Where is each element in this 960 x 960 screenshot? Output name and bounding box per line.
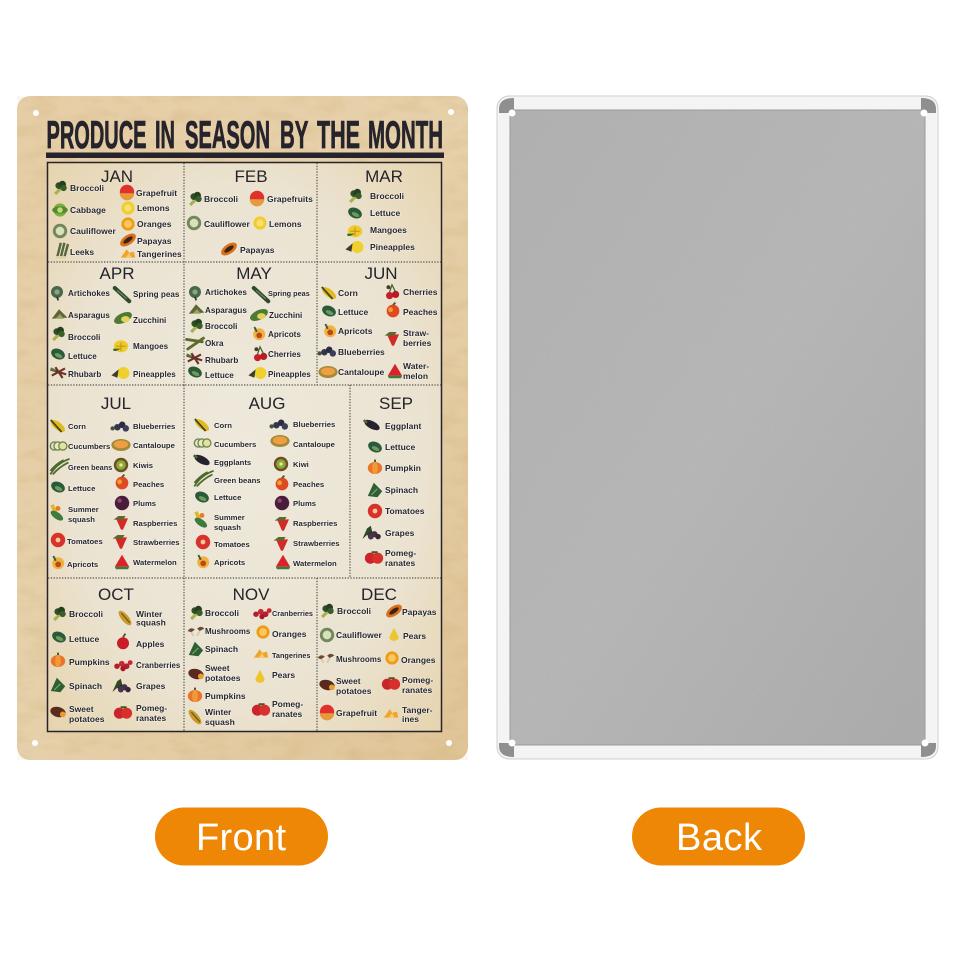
item: Pumpkins: Pumpkins — [69, 657, 110, 667]
title rule — [46, 152, 444, 158]
panel: September — [362, 394, 425, 568]
item: Summer squash: squash — [214, 523, 241, 532]
panel: August — [193, 394, 340, 569]
item: Summer squash — [193, 512, 245, 532]
panel: April — [49, 264, 180, 379]
item: Corn: Corn — [338, 288, 358, 298]
item: Cherries: Cherries — [403, 287, 438, 297]
item: Papayas: Papayas — [402, 607, 437, 617]
item: Pomegranates — [252, 699, 303, 719]
item: Broccoli: Broccoli — [205, 322, 237, 331]
item: Lettuce: Lettuce — [338, 307, 368, 317]
item: Sweet potatoes — [49, 704, 105, 724]
item: Eggplants — [193, 453, 251, 467]
item: Broccoli: Broccoli — [370, 191, 404, 201]
item: Winter squash: squash — [205, 717, 235, 727]
item: Pomegranates — [114, 703, 167, 723]
item: Plums: Plums — [133, 499, 156, 508]
item: Strawberries — [385, 328, 432, 348]
item: Cabbage: Cabbage — [70, 205, 106, 215]
item: Kiwis: Kiwis — [133, 461, 153, 470]
item: Peaches: Peaches — [293, 480, 324, 489]
item: Pumpkin: Pumpkin — [385, 463, 421, 473]
heading: APR: APR — [100, 264, 134, 283]
item: Kiwi: Kiwi — [293, 460, 309, 469]
item: Sweet potatoes: potatoes — [336, 686, 372, 696]
item: Winter squash — [186, 707, 235, 727]
item: Pomegranates: Pomeg- — [136, 703, 167, 713]
item: Tangerines — [254, 649, 310, 660]
item: Peaches: Peaches — [403, 307, 438, 317]
item: Watermelon: melon — [403, 371, 428, 381]
heading: JUL: JUL — [101, 394, 131, 413]
item: Broccoli: Broccoli — [204, 194, 238, 204]
item: Pineapples: Pineapples — [133, 370, 176, 379]
item: Tangerines: Tangerines — [272, 651, 310, 660]
item: Winter squash — [116, 609, 166, 628]
item: Cantaloupe: Cantaloupe — [338, 367, 385, 377]
item: Cucumbers: Cucumbers — [214, 440, 256, 449]
item: Pears: Pears — [403, 631, 426, 641]
item: Raspberries — [275, 517, 337, 531]
item: Tomatoes — [368, 504, 425, 518]
item: Watermelon — [115, 555, 177, 569]
item: Grapefruits: Grapefruits — [267, 194, 313, 204]
item: Cantaloupe: Cantaloupe — [133, 441, 176, 450]
item: Asparagus: Asparagus — [68, 311, 110, 320]
item: Tomatoes — [196, 535, 250, 549]
item: Lettuce: Lettuce — [385, 442, 416, 452]
item: Winter squash: squash — [136, 618, 166, 628]
item: Pumpkins — [188, 688, 246, 702]
item: Pears: Pears — [272, 670, 295, 680]
item: Strawberries: Straw- — [403, 328, 429, 338]
brushed grey metal back — [510, 110, 925, 745]
item: Tomatoes: Tomatoes — [67, 537, 103, 546]
item: Summer squash — [49, 505, 99, 524]
item: Tomatoes: Tomatoes — [214, 540, 250, 549]
item: Okra: Okra — [205, 339, 224, 348]
item: Tangerines: Tangerines — [137, 249, 182, 259]
item: Tangerines: Tanger- — [402, 705, 433, 715]
item: Broccoli: Broccoli — [68, 333, 100, 342]
item: Pomegranates: ranates — [136, 713, 167, 723]
item: Spinach: Spinach — [69, 681, 102, 691]
item: Strawberries — [113, 535, 180, 549]
item: Artichokes: Artichokes — [205, 288, 247, 297]
item: Apricots: Apricots — [268, 330, 301, 339]
item: Plums — [115, 496, 156, 510]
white aluminium frame — [497, 96, 938, 759]
item: Mushrooms: Mushrooms — [205, 627, 251, 636]
panel: front tin sign — [17, 96, 468, 760]
item: Sweet potatoes: Sweet — [336, 676, 361, 686]
heading: MAR: MAR — [365, 167, 403, 186]
icon: bottom-left mounting hole — [32, 740, 38, 746]
panel: October — [49, 585, 181, 724]
heading: SEP: SEP — [379, 394, 413, 413]
item: Broccoli: Broccoli — [70, 183, 104, 193]
item: Corn — [193, 417, 232, 433]
item: Sweet potatoes: potatoes — [69, 714, 105, 724]
item: Apricots: Apricots — [67, 560, 98, 569]
item: Blueberries: Blueberries — [133, 422, 175, 431]
item: Lemons: Lemons — [269, 219, 302, 229]
item: Raspberries — [114, 516, 177, 530]
title: BY — [280, 114, 308, 157]
item: Pumpkins: Pumpkins — [205, 691, 246, 701]
item: Eggplant — [363, 418, 422, 432]
item: Oranges: Oranges — [401, 655, 436, 665]
item: Pomegranates: ranates — [272, 709, 303, 719]
item: Spring peas: Spring peas — [268, 289, 310, 298]
item: Corn: Corn — [68, 422, 86, 431]
item: Kiwis — [114, 458, 153, 472]
item: Pomegranates: ranates — [385, 558, 416, 568]
item: Grapefruit: Grapefruit — [136, 188, 177, 198]
item: Plums: Plums — [293, 499, 316, 508]
panel: July — [49, 394, 180, 569]
item: Mangoes: Mangoes — [370, 225, 407, 235]
heading: OCT: OCT — [98, 585, 134, 604]
heading: JAN: JAN — [101, 167, 133, 186]
heading: AUG: AUG — [249, 394, 285, 413]
item: Mushrooms: Mushrooms — [336, 655, 382, 664]
item: Peaches — [276, 476, 324, 490]
item: Pomegranates — [382, 675, 433, 695]
item: Apples: Apples — [136, 639, 165, 649]
item: Cucumbers: Cucumbers — [68, 442, 110, 451]
heading: MAY: MAY — [236, 264, 272, 283]
icon: top-left corner bracket — [499, 98, 514, 113]
item: Green beans — [194, 471, 261, 486]
heading: JUN: JUN — [364, 264, 398, 283]
item: Lettuce — [193, 489, 242, 505]
item: Grapes — [362, 526, 415, 539]
icon: top-left hole — [508, 110, 516, 116]
item: Sweet potatoes: Sweet — [69, 704, 94, 714]
item: Cauliflower: Cauliflower — [70, 226, 117, 236]
item: Papayas: Papayas — [137, 236, 172, 246]
item: Tomatoes: Tomatoes — [385, 506, 425, 516]
item: Oranges: Oranges — [272, 629, 307, 639]
item: Strawberries: Strawberries — [133, 538, 180, 547]
item: Eggplant: Eggplant — [385, 421, 422, 431]
item: Winter squash: Winter — [136, 609, 162, 619]
item: Green beans: Green beans — [68, 463, 112, 472]
item: Pears — [255, 670, 295, 683]
item: Pomegranates — [365, 548, 416, 568]
item: Raspberries: Raspberries — [293, 519, 337, 528]
heading: FEB: FEB — [234, 167, 268, 186]
button: Front: Front — [196, 817, 286, 859]
item: Grapefruit: Grapefruit — [336, 708, 377, 718]
item: Watermelon — [388, 361, 429, 381]
item: Lettuce: Lettuce — [69, 634, 100, 644]
item: Blueberries — [110, 422, 175, 432]
item: Cauliflower: Cauliflower — [336, 630, 383, 640]
title: PRODUCE — [46, 114, 146, 157]
item: Lettuce — [366, 439, 416, 455]
item: Watermelon: Watermelon — [133, 558, 177, 567]
icon: bottom-right hole — [922, 740, 928, 746]
item: Spinach: Spinach — [385, 485, 418, 495]
item: Leeks: Leeks — [70, 247, 94, 257]
title: THE — [317, 114, 360, 157]
item: Cranberries — [253, 608, 313, 619]
item: Spinach: Spinach — [205, 644, 238, 654]
icon: bottom-left corner bracket — [499, 743, 514, 757]
heading: DEC: DEC — [361, 585, 397, 604]
item: Cranberries: Cranberries — [272, 609, 313, 618]
item: Cherries: Cherries — [268, 350, 301, 359]
item: Sweet potatoes: potatoes — [205, 673, 241, 683]
button: Front — [155, 808, 328, 866]
icon: bottom-right mounting hole — [446, 740, 452, 746]
item: Green beans: Green beans — [214, 476, 261, 485]
item: Apricots: Apricots — [338, 326, 373, 336]
panel: May — [186, 264, 311, 380]
item: Spring peas: Spring peas — [133, 290, 180, 299]
item: Eggplants: Eggplants — [214, 458, 251, 467]
item: Cucumbers — [194, 439, 256, 449]
item: Broccoli — [191, 606, 239, 619]
item: Lettuce: Lettuce — [68, 484, 96, 493]
item: Watermelon — [276, 555, 337, 569]
icon: top-right hole — [920, 110, 928, 116]
item: Cranberries: Cranberries — [136, 661, 181, 670]
item: Broccoli: Broccoli — [205, 608, 239, 618]
item: Plums — [275, 496, 316, 510]
item: Spinach — [189, 642, 238, 656]
item: Tangerines — [384, 705, 433, 724]
item: Tomatoes — [51, 533, 103, 547]
item: Spinach — [368, 483, 418, 497]
item: Lettuce: Lettuce — [205, 371, 234, 380]
item: Peaches — [116, 475, 164, 489]
item: Sweet potatoes: Sweet — [205, 663, 230, 673]
item: Sweet potatoes — [187, 663, 241, 683]
item: Rhubarb: Rhubarb — [205, 356, 238, 365]
item: Summer squash: Summer — [214, 513, 245, 522]
item: Peaches: Peaches — [133, 480, 164, 489]
item: Zucchini: Zucchini — [133, 316, 166, 325]
panel: November — [186, 585, 313, 727]
button: Back — [632, 808, 805, 866]
item: Asparagus: Asparagus — [205, 306, 247, 315]
item: Green beans — [50, 459, 112, 474]
item: Grapes: Grapes — [385, 528, 415, 538]
item: Lettuce: Lettuce — [370, 208, 400, 218]
item: Apricots — [52, 556, 98, 569]
item: Summer squash: Summer — [68, 505, 99, 514]
icon: bottom-left hole — [508, 740, 516, 746]
item: Rhubarb: Rhubarb — [68, 370, 101, 379]
item: Pomegranates: Pomeg- — [272, 699, 303, 709]
item: Broccoli: Broccoli — [69, 609, 103, 619]
item: Apricots — [197, 555, 245, 568]
item: Winter squash: Winter — [205, 707, 231, 717]
title: IN — [155, 114, 175, 157]
item: Summer squash: squash — [68, 515, 95, 524]
item: Pineapples: Pineapples — [370, 242, 415, 252]
icon: top-right mounting hole — [448, 109, 454, 115]
item: Corn: Corn — [214, 421, 232, 430]
item: Pomegranates: Pomeg- — [385, 548, 416, 558]
item: Grapes: Grapes — [136, 681, 166, 691]
item: Cucumbers — [50, 442, 110, 451]
item: Blueberries — [269, 420, 335, 430]
item: Cantaloupe — [111, 439, 176, 451]
item: Zucchini: Zucchini — [269, 311, 302, 320]
item: Oranges: Oranges — [137, 219, 172, 229]
item: Lettuce — [49, 479, 96, 495]
item: Apricots: Apricots — [214, 558, 245, 567]
item: Lemons: Lemons — [137, 203, 170, 213]
panel: January — [52, 167, 182, 259]
item: Broccoli: Broccoli — [337, 606, 371, 616]
item: Blueberries: Blueberries — [338, 347, 385, 357]
item: Papayas: Papayas — [240, 245, 275, 255]
panel: month grid — [48, 162, 442, 732]
item: Lettuce: Lettuce — [68, 352, 97, 361]
item: Tangerines: ines — [402, 714, 419, 724]
item: Cauliflower: Cauliflower — [204, 219, 251, 229]
item: Kiwi — [274, 457, 309, 471]
item: Pomegranates: Pomeg- — [402, 675, 433, 685]
item: Corn — [49, 418, 86, 434]
item: Cantaloupe: Cantaloupe — [293, 440, 336, 449]
panel: December — [318, 585, 437, 724]
item: Strawberries — [274, 537, 340, 551]
panel: February — [187, 167, 313, 258]
item: Pumpkin — [368, 460, 421, 474]
item: Oranges — [256, 625, 307, 639]
item: Mangoes: Mangoes — [133, 342, 169, 351]
heading: NOV: NOV — [233, 585, 270, 604]
panel: June — [317, 264, 438, 381]
button: Back: Back — [676, 817, 763, 859]
item: Cantaloupe — [270, 435, 336, 449]
item: Watermelon: Watermelon — [293, 559, 337, 568]
panel: back of sign — [497, 96, 938, 759]
panel: March — [345, 167, 415, 253]
item: Strawberries: berries — [403, 338, 432, 348]
item: Artichokes: Artichokes — [68, 289, 110, 298]
icon: top-left mounting hole — [33, 110, 39, 116]
item: Raspberries: Raspberries — [133, 519, 177, 528]
item: Strawberries: Strawberries — [293, 539, 340, 548]
item: Pomegranates: ranates — [402, 685, 433, 695]
item: Blueberries: Blueberries — [293, 420, 335, 429]
item: Sweet potatoes — [318, 676, 372, 696]
icon: bottom-right corner bracket — [921, 743, 936, 757]
item: Pineapples: Pineapples — [268, 370, 311, 379]
item: Watermelon: Water- — [403, 361, 429, 371]
item: Lettuce: Lettuce — [214, 493, 242, 502]
title: MONTH — [368, 114, 443, 157]
title: SEASON — [185, 114, 270, 157]
icon: top-right corner bracket — [921, 98, 936, 113]
